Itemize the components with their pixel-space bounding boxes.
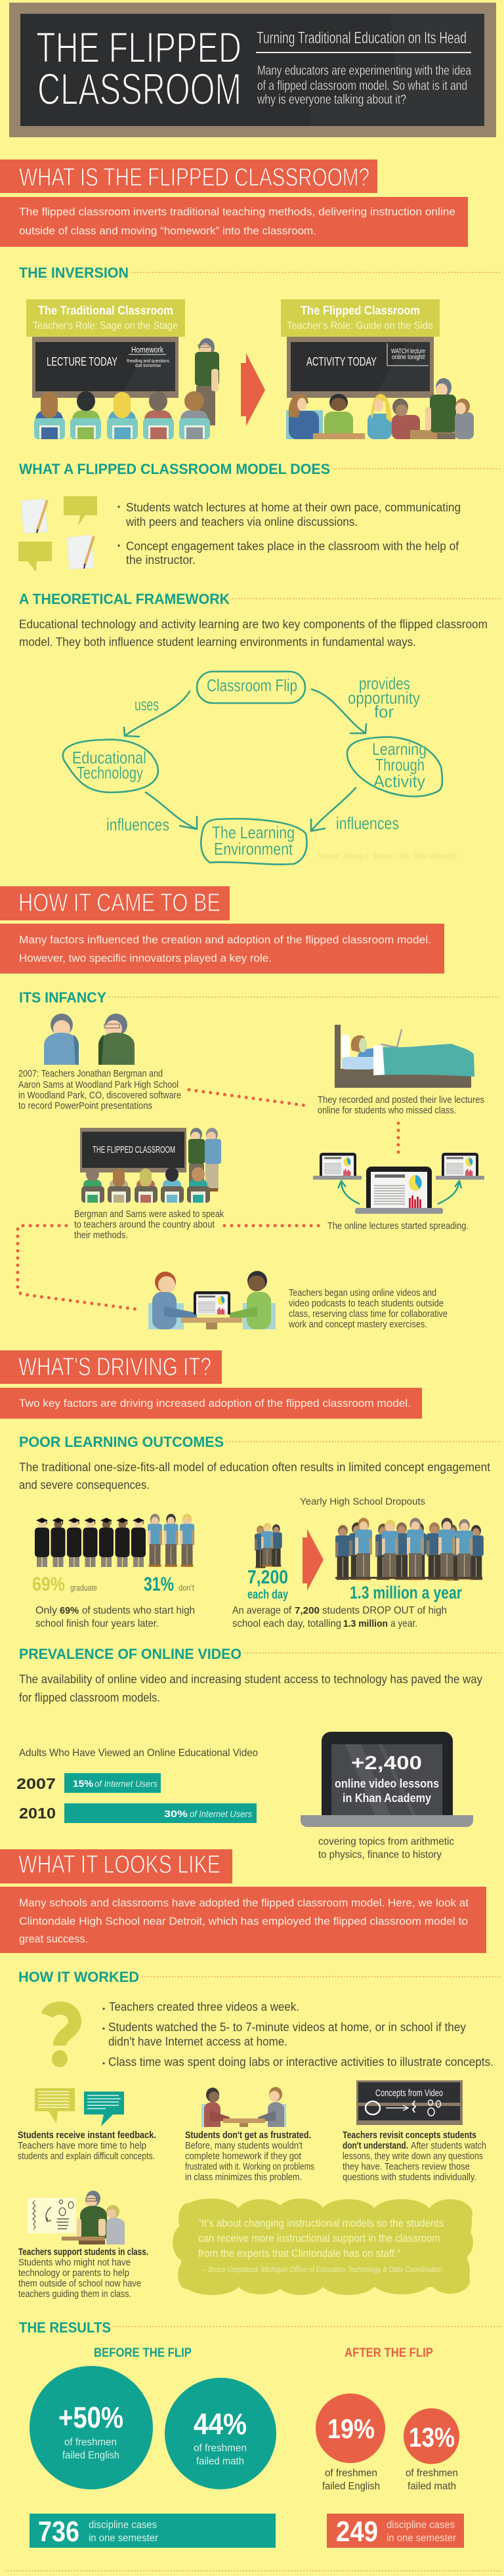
- dropouts caption: 7,200: [295, 1605, 320, 1616]
- bullet list: the instructor.: [126, 553, 196, 567]
- text: instant feedback: Teachers have more time to help: [18, 2141, 146, 2151]
- text: less frustrated: frustrated with it. Working on problems: [185, 2162, 314, 2172]
- quote cloud: from the experts that Clintondale has on staff.”: [198, 2248, 400, 2260]
- section banner: what's driving it: [0, 1350, 222, 1384]
- heading: its infancy: ITS INFANCY: [19, 989, 106, 1006]
- bar: 249 discipline cases: 249: [336, 2516, 378, 2548]
- node: the learning environment: The Learning: [212, 823, 295, 842]
- blackboard: Reading and questions: [127, 358, 169, 364]
- laptop: khan academy: +2,400: [351, 1753, 422, 1774]
- dotted link: speaking to teachers: [18, 1226, 140, 1310]
- icon: two teachers: [44, 1014, 135, 1065]
- stat: 31% don't: don't: [178, 1583, 194, 1593]
- bullet list: with peers and teachers via online discussions.: [125, 515, 358, 528]
- graduates caption: of students who start high: [82, 1605, 195, 1616]
- caption: 2007: 2007: Teachers Jonathan Bergman and: [18, 1069, 163, 1079]
- icon: large crowd of dropouts: [335, 1518, 484, 1581]
- arrow: [303, 1529, 324, 1591]
- text: revisit concepts: they have. Teachers review those: [343, 2162, 470, 2172]
- caption: teachers began: work and concept mastery exercises.: [288, 1320, 427, 1330]
- bullet list: Concept engagement takes place in the classroom with the help of: [126, 540, 459, 553]
- stat: 31% don't: 31%: [144, 1574, 174, 1595]
- blackboard: [32, 337, 178, 398]
- bullet list: Class time was spent doing labs or interactive activities to illustrate concepts.: [108, 2055, 494, 2069]
- laptop caption: [318, 1836, 454, 1860]
- bar: 2010: [19, 1803, 257, 1823]
- looks like intro panel: Many schools and classrooms have adopted the flipped classroom model. Here, we look at: [19, 1897, 469, 1909]
- quote cloud: [173, 2199, 473, 2295]
- node: classroom flip: [197, 672, 305, 703]
- icon: speech bubble: [64, 496, 97, 526]
- blackboard: due tomorrow: [135, 362, 161, 368]
- icon: concepts board: Concepts from Video: [375, 2088, 443, 2099]
- heading: a theoretical framework: A THEORETICAL FRAMEWORK: [19, 591, 230, 607]
- circle: 19% failed English: [316, 2394, 385, 2492]
- text: teachers support: Students who might not have: [18, 2258, 131, 2268]
- bar: 736 discipline cases: discipline cases: [89, 2520, 157, 2531]
- icon row: graduates: [35, 1514, 194, 1567]
- quote cloud: “It's about changing instructional models so the students: [198, 2218, 444, 2229]
- icon: notepad with pencil: [67, 535, 94, 569]
- section banner: what is the flipped classroom: [0, 160, 377, 193]
- text: teachers support: teachers guiding them in class.: [18, 2289, 131, 2300]
- text: teachers support: technology or parents to help: [18, 2268, 129, 2279]
- intro panel: outside of class and moving “homework” into the classroom.: [19, 225, 316, 237]
- bar: 2010: of Internet Users: [190, 1809, 252, 1819]
- outcomes text: [19, 1461, 490, 1492]
- intro text: [257, 64, 472, 107]
- dropouts caption: students DROP OUT of high: [322, 1605, 447, 1616]
- laptop caption: covering topics from arithmetic: [318, 1836, 454, 1847]
- arrow: uses: uses: [135, 695, 159, 714]
- circle: 19% failed English: of freshmen: [325, 2468, 377, 2479]
- blackboard: LECTURE TODAY: [47, 355, 117, 368]
- circle: 19% failed English: failed English: [322, 2481, 380, 2492]
- framework diagram: [63, 672, 458, 865]
- circle: 44% failed math: [165, 2378, 276, 2489]
- caption: spreading: The online lectures started spreading.: [327, 1221, 469, 1232]
- looks like intro panel: great success.: [19, 1933, 88, 1945]
- node: learning through activity: Learning: [372, 739, 427, 759]
- caption: recorded lectures: online for students who missed class.: [318, 1106, 456, 1116]
- panel: flipped classroom: [281, 299, 474, 439]
- title: THE FLIPPED: [36, 23, 242, 72]
- outcomes text: and severe consequences.: [19, 1478, 150, 1492]
- arrow: provides opportunity for: for: [374, 702, 394, 721]
- icon: presentation to classroom: [80, 1128, 221, 1203]
- bullet list: [102, 2000, 494, 2069]
- circle: 44% failed math: of freshmen: [194, 2443, 247, 2454]
- icon: small group of dropouts: [255, 1523, 282, 1568]
- blackboard: online tonight!: [392, 354, 425, 361]
- dotted link: recorded to spreading: [396, 1123, 400, 1153]
- icon: laptops spreading: [313, 1153, 484, 1214]
- section banner: how it came to be: [0, 886, 230, 920]
- outcomes text: The traditional one-size-fits-all model of education often results in limited concept engagement: [19, 1461, 490, 1474]
- panel: flipped classroom: Teacher's Role: Guide on the Side: [287, 320, 433, 332]
- caption: asked to speak: Bergman and Sams were asked to speak: [74, 1209, 224, 1220]
- blackboard: WATCH lecture: [391, 348, 425, 355]
- circle: 44% failed math: failed math: [196, 2456, 244, 2467]
- header chalkboard: [9, 3, 496, 137]
- caption: teachers began: class, reserving class time for collaborative: [289, 1309, 448, 1320]
- circle: 13% failed math: of freshmen: [406, 2468, 458, 2479]
- bullet list: Teachers created three videos a week.: [109, 2000, 299, 2013]
- caption: recorded lectures: They recorded and posted their live lectures: [318, 1095, 484, 1106]
- bar: 736 discipline cases: [30, 2514, 276, 2548]
- bar: 2010: 30%: [164, 1809, 188, 1820]
- heading: what a flipped classroom model does: WHAT A FLIPPED CLASSROOM MODEL DOES: [19, 461, 330, 477]
- caption: teachers began: video podcasts to teach students outside: [289, 1299, 444, 1309]
- icon: feedback speech bubbles: [35, 2088, 124, 2126]
- teacher: [195, 338, 219, 425]
- arrow: influences right: influences: [336, 813, 399, 833]
- dotted link: 2007 to recorded: [189, 1090, 310, 1106]
- arrow: uses: [124, 691, 190, 737]
- driving intro panel: Two key factors are driving increased adoption of the flipped classroom model.: [19, 1397, 411, 1409]
- bar chart: adults viewing online video: Adults Who Have Viewed an Online Educational Video: [19, 1748, 258, 1759]
- label: before the flip: BEFORE THE FLIP: [94, 2346, 192, 2360]
- icon: students at table: [201, 2087, 286, 2127]
- prevalence text: The availability of online video and increasing student access to technology has paved the way: [19, 1673, 482, 1686]
- history intro panel: However, two specific innovators played a key role.: [19, 952, 272, 964]
- text: revisit concepts: don't understand.: [343, 2141, 408, 2151]
- node: learning through activity: Activity: [373, 771, 425, 791]
- bullet list: Students watched the 5- to 7-minute videos at home, or in school if they: [108, 2021, 466, 2034]
- text: instant feedback: Students receive instant feedback.: [18, 2130, 156, 2141]
- framework text: model. They both influence student learning environments in fundamental ways.: [19, 635, 416, 649]
- caption: asked to speak: [74, 1209, 224, 1241]
- laptop: khan academy: online video lessons: [335, 1777, 439, 1790]
- caption: 2007: [18, 1069, 181, 1111]
- section banner: how it came to be: HOW IT CAME TO BE: [18, 889, 220, 917]
- heading: prevalence of online video: PREVALENCE OF ONLINE VIDEO: [19, 1646, 242, 1662]
- section banner: what is the flipped classroom: WHAT IS THE FLIPPED CLASSROOM?: [19, 163, 369, 192]
- arrow: provides opportunity for: [312, 674, 420, 733]
- dropouts caption: An average of: [232, 1605, 292, 1616]
- laptop caption: to physics, finance to history: [318, 1849, 442, 1860]
- title: CLASSROOM: [37, 64, 242, 114]
- bullet list: [117, 501, 461, 567]
- circle: 44% failed math: 44%: [194, 2407, 247, 2441]
- section banner: what's driving it: WHAT'S DRIVING IT?: [18, 1353, 211, 1381]
- history intro panel: [0, 924, 444, 974]
- title: [36, 23, 242, 114]
- heading: the results: THE RESULTS: [19, 2319, 111, 2336]
- text: instant feedback: students and explain difficult concepts.: [18, 2151, 155, 2162]
- stat: 7,200 each day: 7,200: [247, 1567, 288, 1588]
- text: instant feedback: [18, 2130, 156, 2162]
- intro panel: [0, 197, 468, 247]
- arrow: influences left: [106, 792, 197, 834]
- blackboard: ACTIVITY TODAY: [306, 355, 377, 368]
- text: less frustrated: Before, many students wouldn't: [185, 2141, 303, 2151]
- icon: speech bubble: [18, 542, 52, 572]
- circle: 50% failed English: +50%: [58, 2401, 123, 2434]
- bar: 2007: of Internet Users: [94, 1778, 158, 1789]
- bullet list: Students watch lectures at home at their own pace, communicating: [126, 501, 461, 514]
- panel: flipped classroom: The Flipped Classroom: [301, 304, 420, 317]
- node: learning through activity: Through: [375, 755, 425, 775]
- caption: 2007: in Woodland Park, CO, discovered software: [18, 1090, 181, 1101]
- stat: 69% graduate: [32, 1574, 97, 1595]
- circle: 50% failed English: [30, 2366, 153, 2489]
- text: teachers support: them outside of school now have: [18, 2279, 141, 2289]
- icon: teacher helping student: [28, 2191, 125, 2244]
- text: revisit concepts: Teachers revisit concepts students: [343, 2130, 476, 2141]
- graduates caption: 69%: [60, 1605, 79, 1616]
- dropouts caption: [232, 1605, 447, 1629]
- node: educational technology: Educational: [72, 748, 146, 767]
- icon: students with laptop at table: [148, 1271, 276, 1329]
- intro text: why is everyone talking about it?: [257, 93, 406, 107]
- text: revisit concepts: questions with students individually.: [343, 2172, 476, 2183]
- icon: presentation to classroom: THE FLIPPED CLASSROOM: [93, 1144, 175, 1155]
- students: [34, 391, 210, 439]
- quote cloud: – Bruce Umpstead, Michigan Office of Education Technology & Data Coordination: [202, 2266, 442, 2274]
- text: teachers support: Teachers support students in class.: [18, 2247, 148, 2258]
- icon: question mark: [47, 2008, 75, 2067]
- caption: 2007: Aaron Sams at Woodland Park High School: [18, 1080, 178, 1090]
- section banner: what it looks like: [0, 1849, 232, 1883]
- driving intro panel: [0, 1388, 422, 1419]
- heading: poor learning outcomes: POOR LEARNING OUTCOMES: [19, 1434, 224, 1450]
- panel: traditional classroom: [26, 299, 219, 439]
- stat: 69% graduate: graduate: [70, 1583, 97, 1593]
- icon: concepts board: [356, 2080, 463, 2125]
- quote cloud: can receive more instructional support in the classroom: [198, 2233, 440, 2244]
- caption: asked to speak: to teachers around the country about: [74, 1220, 215, 1230]
- source: Source: Jeremy F. Strayer, Ohio State University: [318, 853, 458, 861]
- graduates caption: Only: [35, 1605, 57, 1616]
- arrow: influences left: influences: [106, 815, 169, 834]
- node: learning through activity: [347, 737, 442, 796]
- stat: 69% graduate: 69%: [32, 1574, 65, 1595]
- chalk rule: [256, 52, 471, 53]
- bar: 2007: 15%: [73, 1778, 93, 1790]
- circle: 13% failed math: failed math: [408, 2481, 456, 2492]
- text: less frustrated: [185, 2130, 314, 2183]
- bar: 2007: [16, 1773, 161, 1793]
- dropouts caption: 1.3 million: [343, 1618, 388, 1629]
- caption: asked to speak: their methods.: [74, 1230, 128, 1241]
- stat: 7,200 each day: [247, 1567, 288, 1602]
- bar: 249 discipline cases: in one semester: [387, 2533, 456, 2544]
- circle: 50% failed English: of freshmen: [64, 2437, 117, 2448]
- bar: 2010: 2010: [19, 1805, 56, 1822]
- stat: 7,200 each day: each day: [247, 1588, 288, 1602]
- caption: recorded lectures: [318, 1095, 484, 1116]
- bar chart: adults viewing online video: [16, 1748, 258, 1823]
- heading: how it worked: HOW IT WORKED: [18, 1969, 139, 1985]
- blackboard: [287, 337, 434, 398]
- icon: notepad with pencil: [21, 499, 47, 533]
- arrow: provides opportunity for: opportunity: [348, 688, 420, 708]
- node: the learning environment: [201, 819, 306, 865]
- node: educational technology: [63, 740, 158, 792]
- dropouts chart title: Yearly High School Dropouts: [300, 1497, 425, 1507]
- arrow: influences right: [311, 788, 399, 833]
- circle: 13% failed math: 13%: [409, 2422, 455, 2453]
- caption: 2007: to record PowerPoint presentations: [18, 1101, 152, 1111]
- panel: traditional classroom: The Traditional Classroom: [38, 304, 173, 317]
- students and teacher at tables: [286, 378, 474, 439]
- stat: 1.3 million: 1.3 million a year: [350, 1583, 462, 1602]
- caption: teachers began: Teachers began using online videos and: [289, 1288, 436, 1299]
- label: after the flip: AFTER THE FLIP: [345, 2346, 433, 2360]
- heading: the inversion: THE INVERSION: [19, 265, 129, 281]
- prevalence text: [19, 1673, 482, 1704]
- bullet list: didn't have Internet access at home.: [108, 2035, 287, 2048]
- graduates caption: [35, 1605, 195, 1629]
- looks like intro panel: [0, 1887, 486, 1953]
- bar: 2007: 2007: [16, 1775, 56, 1792]
- prevalence text: for flipped classroom models.: [19, 1691, 160, 1704]
- history intro panel: Many factors influenced the creation and adoption of the flipped classroom model.: [19, 934, 431, 946]
- section banner: what it looks like: WHAT IT LOOKS LIKE: [18, 1851, 220, 1879]
- dotted link: spreading to speaking: [222, 1224, 318, 1228]
- blackboard: Homework: [131, 345, 163, 354]
- dropouts caption: school each day, totalling: [232, 1618, 341, 1629]
- text: less frustrated: in class minimizes this problem.: [185, 2172, 302, 2183]
- text: less frustrated: complete homework if they got: [185, 2151, 301, 2162]
- framework text: Educational technology and activity learning are two key components of the flipped classroom: [19, 618, 488, 631]
- text: revisit concepts: After students watch: [411, 2141, 486, 2151]
- text: revisit concepts: [343, 2130, 486, 2183]
- bar: 736 discipline cases: in one semester: [89, 2533, 158, 2544]
- graduates caption: school finish four years later.: [35, 1618, 159, 1629]
- circle: 13% failed math: [404, 2408, 459, 2492]
- laptop: khan academy: [301, 1732, 473, 1827]
- bar: 736 discipline cases: 736: [38, 2516, 79, 2548]
- node: educational technology: Technology: [77, 763, 143, 783]
- circle: 19% failed English: 19%: [327, 2413, 375, 2444]
- bar: 249 discipline cases: discipline cases: [387, 2520, 455, 2531]
- panel: traditional classroom: Teacher's Role: Sage on the Stage: [33, 320, 178, 332]
- dropouts caption: a year.: [390, 1618, 417, 1629]
- arrow: provides opportunity for: provides: [359, 674, 410, 693]
- circle: 50% failed English: failed English: [62, 2450, 119, 2461]
- text: revisit concepts: lessons, they write down any questions: [343, 2151, 483, 2162]
- intro panel: The flipped classroom inverts traditional teaching methods, delivering instruction online: [19, 205, 455, 218]
- node: the learning environment: Environment: [214, 839, 293, 859]
- framework text: [19, 618, 488, 649]
- arrow: [241, 353, 265, 426]
- icon: student watching in bed: [335, 1025, 474, 1088]
- laptop: khan academy: in Khan Academy: [343, 1792, 431, 1805]
- looks like intro panel: Clintondale High School near Detroit, which has employed the flipped classroom model to: [19, 1915, 468, 1927]
- text: teachers support: [18, 2247, 148, 2300]
- node: classroom flip: Classroom Flip: [207, 676, 297, 695]
- text: less frustrated: Students don't get as frustrated.: [185, 2130, 311, 2141]
- bar: 249 discipline cases: [327, 2514, 464, 2548]
- caption: teachers began: [288, 1288, 448, 1330]
